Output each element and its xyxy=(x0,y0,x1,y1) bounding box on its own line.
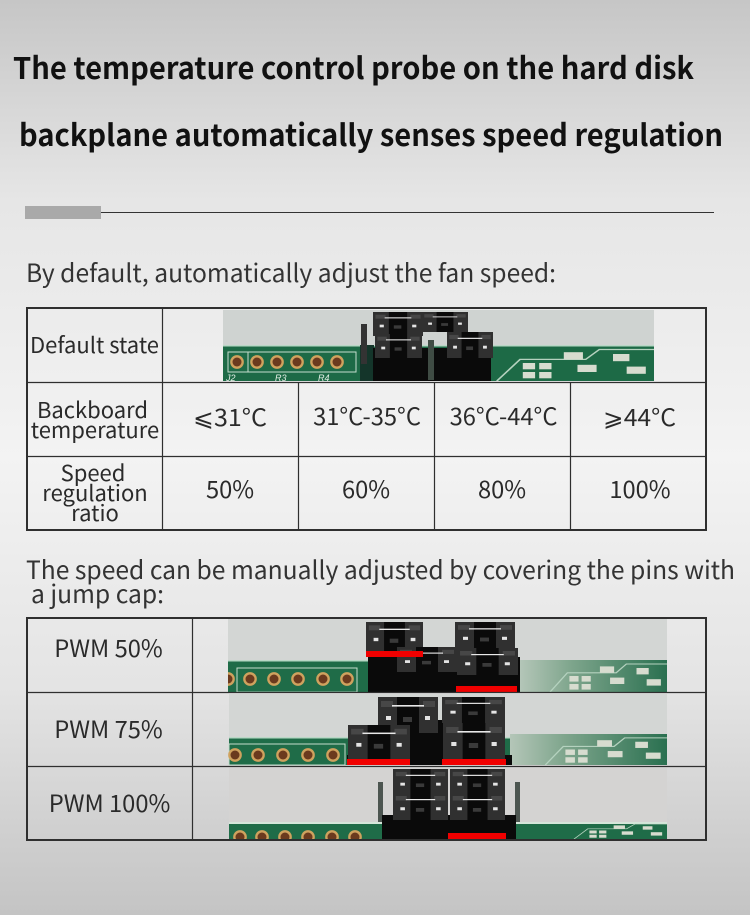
panel: PWM jumper table xyxy=(27,618,706,844)
label: PWM 100%: PWM 100% xyxy=(49,785,170,819)
photo: default jumper state: R4 xyxy=(318,373,330,383)
row: backboard temperature: 31°C-35°C xyxy=(313,398,421,432)
intro text: manual mode: The speed can be manually adjusted by covering the pins with xyxy=(26,551,735,587)
label: PWM 75%: PWM 75% xyxy=(54,711,163,745)
table grid xyxy=(27,308,706,530)
row: speed regulation ratio: 80% xyxy=(478,471,526,505)
row: backboard temperature: 36°C-44°C xyxy=(450,398,557,432)
photo: default jumper state: J2 xyxy=(225,373,236,383)
title xyxy=(13,44,723,155)
row: backboard temperature: temperature xyxy=(31,413,159,445)
photo: PWM 75% xyxy=(228,694,667,765)
intro text: default mode: By default, automatically adjust the fan speed: xyxy=(26,254,556,290)
photo: default jumper state xyxy=(223,310,654,383)
row: backboard temperature xyxy=(31,393,676,445)
heading divider xyxy=(25,206,714,219)
row: speed regulation ratio xyxy=(42,456,671,528)
row: speed regulation ratio: ratio xyxy=(71,496,119,528)
intro text: manual mode: a jump cap: xyxy=(31,575,164,611)
photo: default jumper state: R3 xyxy=(275,373,287,383)
row: backboard temperature: ⩽31°C xyxy=(193,399,267,433)
row: speed regulation ratio: 60% xyxy=(342,471,390,505)
panel: default speed table xyxy=(27,308,706,530)
title: backplane automatically senses speed regulation xyxy=(19,111,723,155)
label: PWM 50%: PWM 50% xyxy=(54,630,163,664)
table grid xyxy=(27,618,706,840)
photo: PWM 100% xyxy=(229,768,667,844)
row: backboard temperature: Backboard xyxy=(37,393,148,425)
row: speed regulation ratio: 50% xyxy=(206,471,254,505)
row: speed regulation ratio: 100% xyxy=(609,471,671,505)
row: speed regulation ratio: Speed xyxy=(61,456,125,488)
row: backboard temperature: ⩾44°C xyxy=(603,399,676,433)
row: default state label: Default state xyxy=(30,328,159,360)
title: The temperature control probe on the hard disk xyxy=(13,44,694,88)
row: speed regulation ratio: regulation xyxy=(42,476,148,508)
photo: PWM 50% xyxy=(221,619,667,692)
intro text: manual mode xyxy=(26,551,735,611)
